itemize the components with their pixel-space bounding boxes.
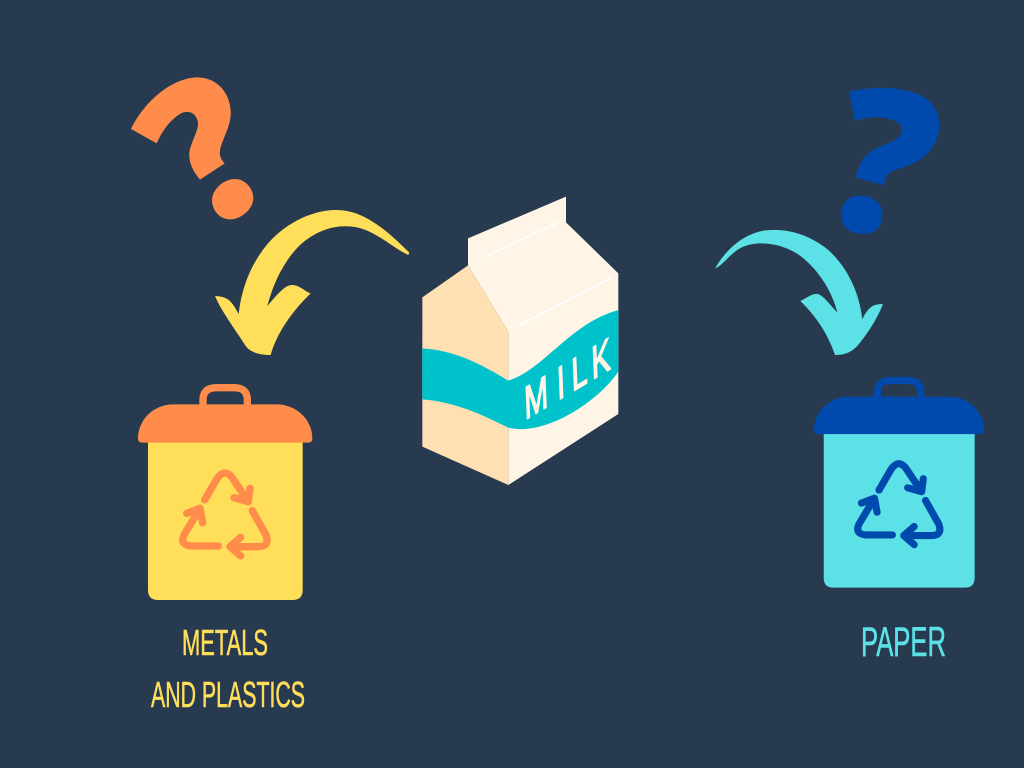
- arrow: cyan curved arrow to paper bin: [715, 230, 883, 355]
- carton left side face: [422, 265, 508, 485]
- milk carton: [422, 197, 618, 485]
- recycling symbol: [858, 464, 940, 545]
- carton label: MILK: MILK: [523, 328, 612, 430]
- paper bin: [814, 380, 984, 588]
- teal band on carton: [422, 310, 618, 429]
- bin body: [148, 440, 303, 600]
- icon: blue question mark: [841, 88, 939, 234]
- label: paper: PAPER: [861, 618, 946, 665]
- carton front and top face: [468, 197, 618, 485]
- bin body: [824, 432, 975, 588]
- metals and plastics bin: [138, 388, 312, 600]
- label: metals and plastics: [151, 622, 305, 715]
- bin lid: [138, 404, 312, 443]
- bin lid: [814, 397, 984, 434]
- label: metals and plastics: METALS: [182, 622, 268, 663]
- carton fold lines: [485, 222, 611, 325]
- arrow: yellow curved arrow to metals bin: [215, 210, 409, 355]
- recycling symbol: [183, 473, 267, 556]
- label: metals and plastics: AND PLASTICS: [151, 674, 305, 715]
- bin handle: [203, 388, 247, 407]
- icon: orange question mark: [131, 77, 253, 219]
- bin handle: [877, 380, 921, 399]
